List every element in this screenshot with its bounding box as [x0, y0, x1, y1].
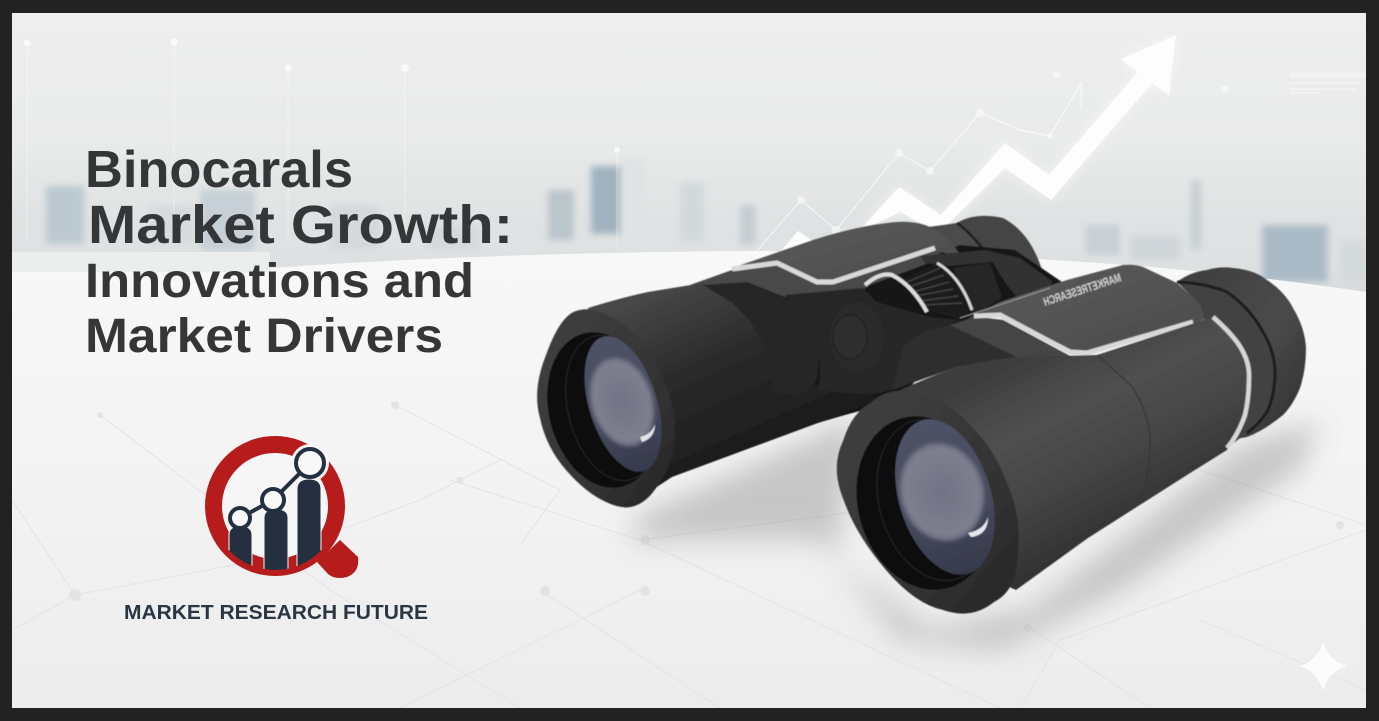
- table grid lines: [12, 401, 1366, 708]
- wedge below right trim: [950, 317, 1097, 358]
- engraved brand text: MARKETRESEARCH: [1042, 271, 1123, 309]
- right shoulder: [892, 317, 1097, 390]
- left armour shoulder: [703, 282, 819, 395]
- focus wheel: [865, 263, 972, 318]
- dark central core: [700, 245, 1062, 440]
- bar chart: [229, 479, 321, 575]
- trend nodes: [230, 449, 324, 528]
- rear eyepiece: [928, 216, 1042, 300]
- growth arrow: [756, 35, 1176, 252]
- node halo: [291, 444, 329, 482]
- title line 3: Innovations and: [85, 255, 474, 308]
- left barrel: [588, 283, 880, 508]
- hinge cap: [830, 302, 884, 372]
- vertical light markers: [24, 38, 1229, 250]
- thin line chart: [756, 72, 1081, 252]
- rear cylinder: [953, 263, 1002, 317]
- wedge below rear trim: [690, 250, 942, 297]
- front objective lens: [837, 391, 1019, 614]
- ground shadow: [630, 415, 1320, 650]
- magnifier handle: [317, 540, 358, 578]
- title line 4: Market Drivers: [85, 310, 443, 363]
- central hinge block: [785, 288, 960, 395]
- rear upper plate: [732, 222, 962, 285]
- binoculars: [531, 216, 1320, 650]
- barrel seam: [1097, 355, 1150, 495]
- rear silver trim: [732, 248, 935, 282]
- logo: [214, 444, 358, 578]
- growth arrow glow: [892, 168, 1050, 219]
- light ledge at left: [12, 252, 270, 272]
- hazy sky: [12, 13, 1366, 303]
- right barrel: [888, 317, 1249, 590]
- title line 2: Market Growth:: [88, 195, 513, 255]
- right silver trim: [974, 315, 1193, 353]
- sparkle icon: [1300, 642, 1347, 691]
- blurred city skyline: [12, 158, 1366, 282]
- table surface: [12, 251, 1366, 708]
- plate highlight edge: [960, 288, 1050, 318]
- magnifier ring: [214, 444, 336, 568]
- left objective lens: [531, 309, 676, 507]
- eyepiece silver band: [1213, 317, 1249, 448]
- title: [85, 141, 513, 363]
- bridge arms: [920, 250, 1052, 300]
- brand name: MARKET RESEARCH FUTURE: [124, 602, 428, 624]
- right eyepiece: [1177, 267, 1306, 448]
- right upper plate: [966, 265, 1213, 355]
- trend line: [240, 463, 310, 518]
- title line 1: Binocarals: [85, 141, 353, 199]
- faint data panel top right: [1290, 72, 1366, 94]
